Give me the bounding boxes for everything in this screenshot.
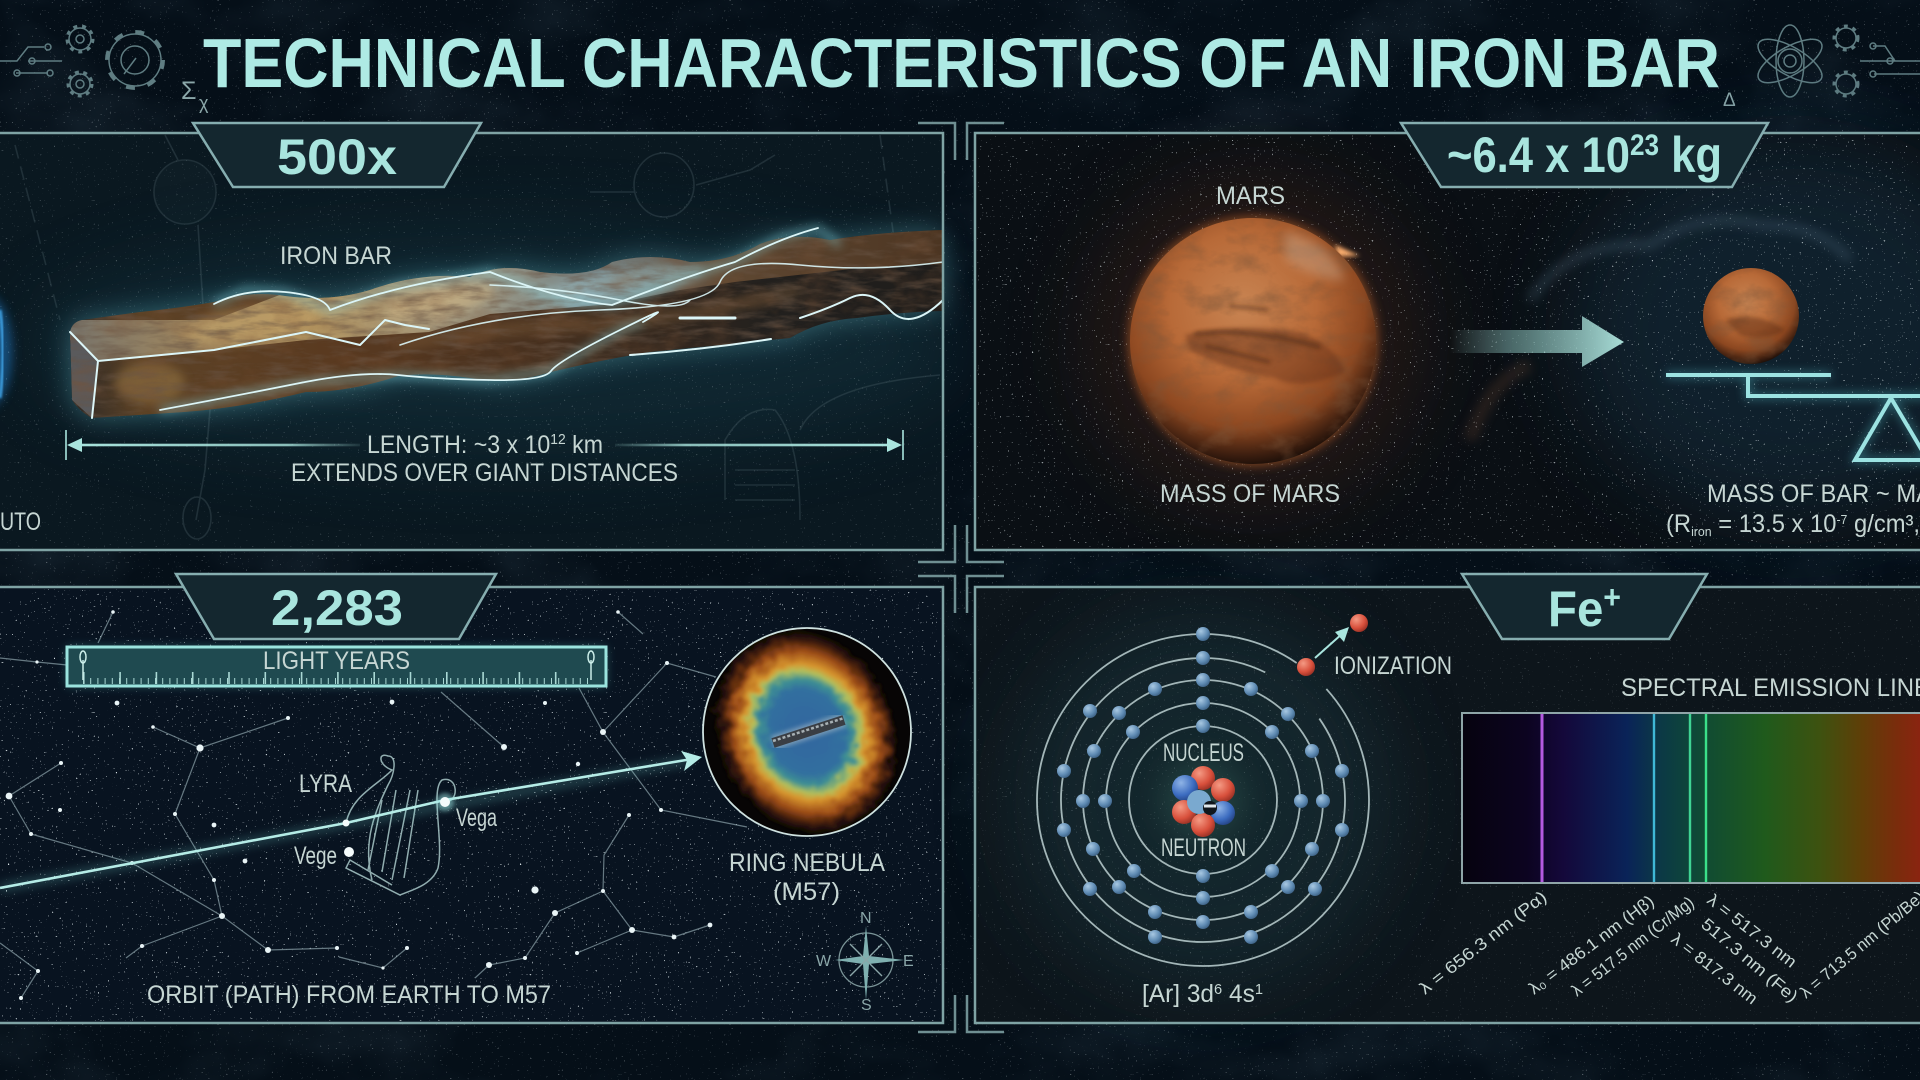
- icon: compass: S: [861, 997, 872, 1014]
- label: ionization: IONIZATION: [1334, 652, 1452, 680]
- ruler: light years: [67, 647, 606, 686]
- badge: Mars mass value: ~6.4 x 10: [1447, 127, 1657, 183]
- chart: emission spectrum: [1462, 713, 1920, 883]
- label: mass of bar: [1666, 480, 1920, 539]
- badge: 2,283: 2,283: [271, 580, 403, 636]
- nucleus: [1161, 758, 1245, 842]
- panel: distance to Ring Nebula: [0, 574, 943, 1023]
- decorative corner brackets: [918, 123, 1004, 1032]
- title: TECHNICAL CHARACTERISTICS OF AN IRON BAR: [203, 24, 1720, 102]
- Ring Nebula circle: [702, 627, 912, 837]
- label: electron configuration: 4s: [1222, 980, 1255, 1008]
- star: Vega points: [342, 793, 454, 857]
- iron bar: [60, 225, 950, 425]
- icon: compass: [816, 910, 914, 1014]
- labels: wavelength annotations: λ = 656.3 nm (Pα): [1416, 887, 1550, 998]
- panel frame: [975, 587, 1920, 1023]
- labels: wavelength annotations: 517.3 nm (Fe): [1697, 915, 1802, 1006]
- atom orbits: [969, 566, 1437, 1034]
- label: Ring Nebula: (M57): [773, 878, 840, 906]
- labels: wavelength annotations: [1416, 887, 1920, 1008]
- orbit path arrow: [0, 751, 702, 888]
- labels: Lyra and Vega: LYRA: [299, 770, 352, 798]
- labels: wavelength annotations: λ = 817.3 nm: [1668, 929, 1761, 1008]
- labels: wavelength annotations: λ₀ = 486.1 nm (Hβ): [1525, 892, 1658, 998]
- panel: ionized iron: [969, 566, 1920, 1034]
- labels: nucleus and neutron: NEUTRON: [1161, 834, 1246, 862]
- length text: km: [566, 431, 603, 459]
- labels: nucleus and neutron: [1161, 739, 1246, 862]
- panel frame: [975, 133, 1920, 550]
- length text: LENGTH: ~3 x 10: [367, 431, 565, 459]
- ruler: light years: LIGHT YEARS: [263, 647, 410, 675]
- electrons: [1057, 627, 1349, 944]
- label: electron configuration: 6: [1214, 981, 1222, 998]
- badge: Fe+: +: [1603, 579, 1621, 615]
- constellation lines: [0, 612, 747, 998]
- labels: wavelength annotations: λ = 517.5 nm (Cr/Mg): [1568, 893, 1698, 1000]
- length text: [291, 431, 678, 487]
- arrow: length dimension: [66, 430, 903, 460]
- constellation stars: [6, 610, 712, 1000]
- icon: compass: N: [860, 910, 872, 927]
- length text: 12: [550, 431, 566, 448]
- iron bar inside nebula: [773, 720, 844, 743]
- icon: Lyra harp: [346, 755, 455, 895]
- label: mass of Mars: MASS OF MARS: [1160, 480, 1340, 508]
- labels: nucleus and neutron: NUCLEUS: [1163, 739, 1244, 767]
- badge: Mars mass value: 23: [1630, 129, 1659, 162]
- wispy nebula: [1470, 220, 1850, 440]
- icon: sigma chi symbol: [181, 77, 209, 113]
- labels: Lyra and Vega: Vega: [456, 804, 497, 832]
- icon: right atom, gears and circuit: [1752, 25, 1920, 97]
- labels: Lyra and Vega: [294, 770, 497, 870]
- label: Pluto: UTO: [0, 508, 41, 536]
- planet: large Mars: [1128, 216, 1378, 466]
- label: electron configuration: [Ar] 3d: [1142, 980, 1216, 1008]
- label: electron configuration: 1: [1255, 981, 1263, 998]
- label: Mars: MARS: [1216, 182, 1285, 210]
- badge: 500x: 500x: [277, 129, 397, 185]
- faint background sketches: [15, 135, 940, 539]
- arrow: Mars to bar: [1450, 316, 1624, 367]
- label: iron bar: IRON BAR: [280, 242, 392, 270]
- badge: Mars mass value: [1401, 123, 1768, 187]
- panel frame: [0, 133, 943, 550]
- label: mass of bar: iron: [1691, 524, 1712, 539]
- label: mass of bar: -7: [1836, 512, 1847, 527]
- icon: balance scale: [1666, 375, 1920, 464]
- badge: 500x: [193, 123, 481, 187]
- label: mass of bar: = 13.5 x 10: [1712, 510, 1836, 538]
- icon: sigma chi symbol: χ: [199, 93, 209, 113]
- label: Ring Nebula: RING NEBULA: [729, 849, 885, 877]
- badge: 2,283: [176, 574, 496, 639]
- labels: Lyra and Vega: Vege: [294, 842, 337, 870]
- label: orbit path: ORBIT (PATH) FROM EARTH TO M57: [147, 981, 551, 1009]
- panel frame: [0, 587, 943, 1023]
- panel: length of iron bar: [0, 123, 970, 550]
- badge: Mars mass value: kg: [1659, 127, 1722, 183]
- label: mass of bar: (R: [1666, 510, 1692, 538]
- icon: delta symbol: Δ: [1723, 90, 1736, 111]
- blue glow of Pluto: [0, 296, 12, 408]
- ionization electrons and arrow: [1297, 614, 1368, 676]
- icon: compass: E: [903, 953, 914, 970]
- labels: wavelength annotations: λ = 517.3 nm: [1704, 890, 1800, 972]
- length text: EXTENDS OVER GIANT DISTANCES: [291, 459, 678, 487]
- badge: Fe+: Fe: [1548, 581, 1606, 637]
- badge: Fe+: [1462, 574, 1707, 639]
- icon: left circuit and gears: [0, 26, 163, 96]
- panel: mass of Mars: [975, 123, 1920, 550]
- planet: small Mars: [1703, 268, 1799, 364]
- icon: sigma chi symbol: Σ: [181, 77, 196, 105]
- lightning arcs: [160, 228, 840, 410]
- icon: compass: W: [816, 953, 832, 970]
- label: Ring Nebula: [729, 849, 885, 906]
